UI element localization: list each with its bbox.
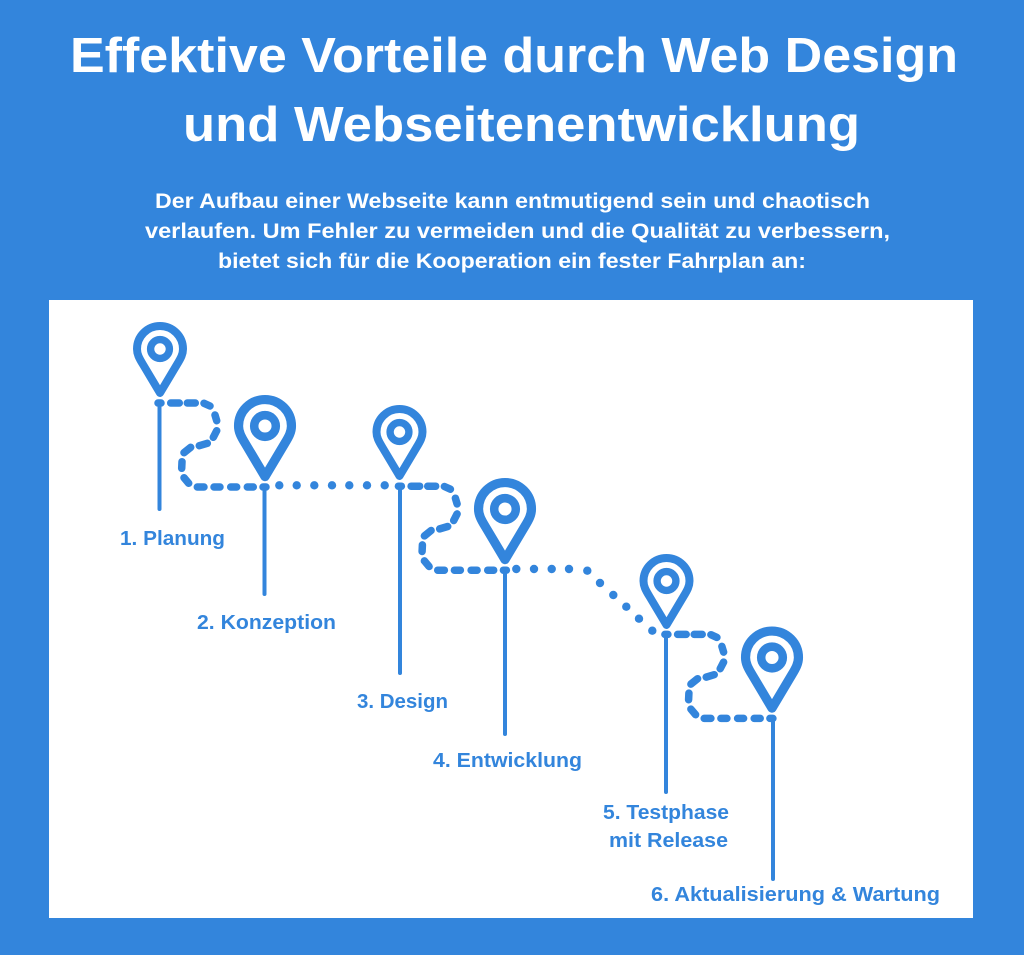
title: Effektive Vorteile durch Web Design xyxy=(70,29,958,83)
dashed path: step 5 to 6 xyxy=(665,634,773,718)
step 2: pin, line and label xyxy=(197,400,336,634)
title xyxy=(70,29,958,152)
dotted path: step 2 to 3 xyxy=(275,481,389,489)
step 3: pin, line and label xyxy=(357,409,448,713)
intro text: verlaufen. Um Fehler zu vermeiden und die Qualität zu verbessern, xyxy=(145,220,890,243)
step 6: pin, line and label: 6. Aktualisierung & Wartung xyxy=(651,883,940,906)
dotted path: step 4 to 5 xyxy=(512,565,656,635)
step 6: pin, line and label xyxy=(651,631,940,906)
panel: roadmap xyxy=(49,300,973,918)
step 3: pin, line and label: 3. Design xyxy=(357,690,448,713)
step 5: pin, line and label: mit Release xyxy=(609,829,728,852)
step 5: pin, line and label xyxy=(603,558,729,852)
intro text: Der Aufbau einer Webseite kann entmutigend sein und chaotisch xyxy=(155,190,870,213)
step 4: pin, line and label: 4. Entwicklung xyxy=(433,749,582,772)
dashed path: step 1 to 2 xyxy=(158,403,266,487)
step 4: pin, line and label xyxy=(433,483,582,772)
intro text xyxy=(145,190,890,273)
title: und Webseitenentwicklung xyxy=(183,98,860,152)
intro text: bietet sich für die Kooperation ein fester Fahrplan an: xyxy=(218,250,806,273)
step 2: pin, line and label: 2. Konzeption xyxy=(197,611,336,634)
step 1: pin, line and label xyxy=(120,326,225,550)
step 1: pin, line and label: 1. Planung xyxy=(120,527,225,550)
step 5: pin, line and label: 5. Testphase xyxy=(603,801,729,824)
dashed path: step 3 to 4 xyxy=(398,486,506,570)
